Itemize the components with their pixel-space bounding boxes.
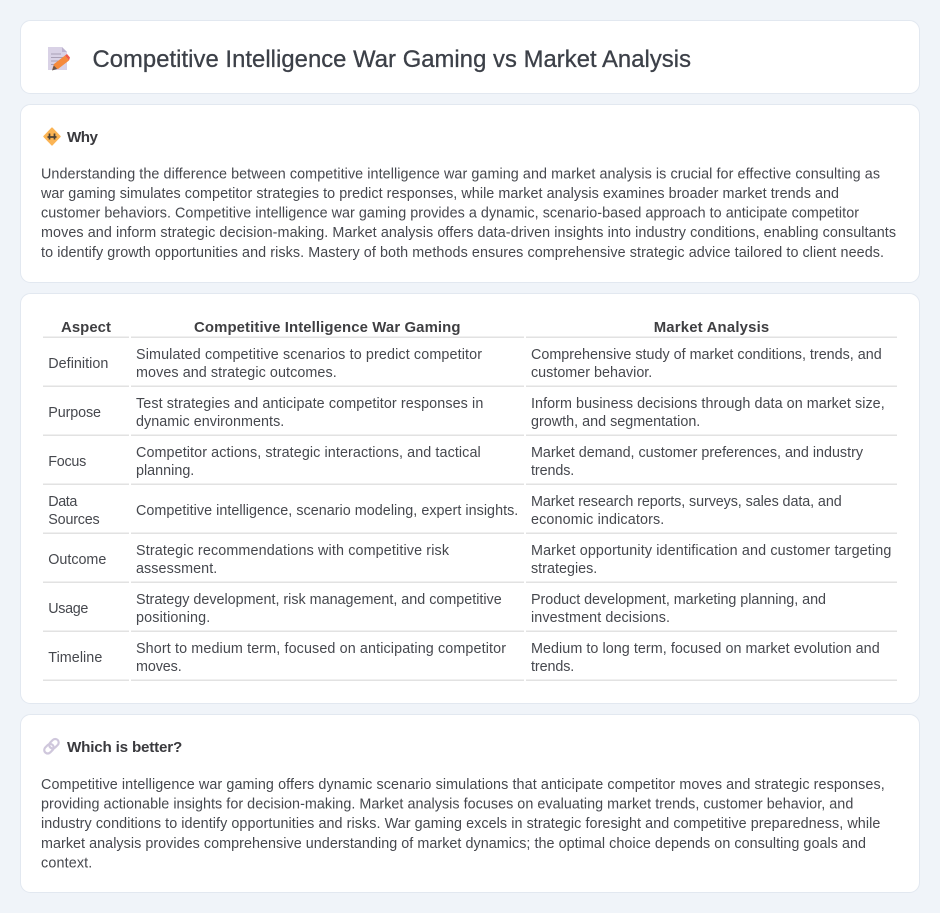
- row: usage: [43, 592, 897, 632]
- row: outcome: assessment.: [136, 561, 217, 577]
- text block: which is better paragraph: market analysis provides comprehensive understanding of market dynamics; the optimal choice depends on consulting goals and: [41, 836, 866, 852]
- icon: orange diamond sign: [44, 128, 60, 145]
- text block: which is better paragraph: context.: [41, 855, 92, 871]
- row: data sources: Data: [48, 494, 77, 510]
- row: purpose: [43, 396, 897, 436]
- row: outcome: Market opportunity identification and customer targeting: [531, 543, 891, 559]
- row: outcome: Strategic recommendations with competitive risk: [136, 543, 450, 559]
- text block: which is better paragraph: industry conditions to identify opportunities and risks. War gaming excels in strategic foresight and competitive preparedness, while: [41, 816, 880, 832]
- text block: why paragraph: moves and inform strategic decision-making. Market analysis offers data-driven insights into industry conditions, enabling consultants: [41, 225, 896, 241]
- row: focus: Focus: [48, 454, 86, 470]
- row: definition: moves and strategic outcomes.: [136, 365, 337, 381]
- row: data sources: Market research reports, surveys, sales data, and: [531, 494, 842, 510]
- row: data sources: Sources: [48, 512, 100, 528]
- row: data sources: economic indicators.: [531, 512, 664, 528]
- icon: chain link: [43, 738, 60, 755]
- text block: which is better paragraph: Competitive intelligence war gaming offers dynamic scenario simulations that anticipate competitor moves and strategic responses,: [41, 777, 885, 793]
- table header row: [43, 320, 897, 338]
- text block: why paragraph: customer behaviors. Competitive intelligence war gaming provides a dynamic, scenario-based approach to anticipate competitor: [41, 206, 859, 222]
- title: Competitive Intelligence War Gaming vs Market Analysis: [92, 46, 691, 73]
- row: purpose: dynamic environments.: [136, 414, 284, 430]
- row: usage: Strategy development, risk management, and competitive: [136, 592, 502, 608]
- row: timeline: Short to medium term, focused on anticipating competitor: [136, 641, 506, 657]
- row: focus: Market demand, customer preferences, and industry: [531, 445, 864, 461]
- text block: why paragraph: war gaming simulates competitor strategies to predict responses, while market analysis examines broader market trends and: [40, 186, 839, 202]
- row: focus: trends.: [531, 463, 574, 479]
- row: definition: Comprehensive study of market conditions, trends, and: [531, 347, 882, 363]
- table header row: Competitive Intelligence War Gaming: [194, 320, 460, 336]
- text block: which is better paragraph: [41, 777, 885, 871]
- heading: why: Why: [67, 129, 99, 146]
- row: timeline: [43, 641, 897, 681]
- row: usage: investment decisions.: [531, 610, 670, 626]
- row: purpose: growth, and segmentation.: [531, 414, 700, 430]
- row: timeline: moves.: [136, 659, 182, 675]
- row: outcome: [43, 543, 897, 583]
- row: purpose: Inform business decisions through data on market size,: [531, 396, 885, 412]
- table header row: Aspect: [61, 320, 111, 336]
- row: outcome: Outcome: [48, 552, 106, 568]
- panel: why: [20, 104, 920, 282]
- text block: why paragraph: [40, 166, 896, 261]
- text block: why paragraph: Understanding the difference between competitive intelligence war gaming and market analysis is crucial for effective consulting as: [41, 166, 880, 182]
- row: focus: [43, 445, 897, 485]
- row: focus: planning.: [136, 463, 194, 479]
- row: definition: Definition: [48, 356, 108, 372]
- panel: title header: [20, 20, 920, 94]
- row: usage: positioning.: [136, 610, 210, 626]
- icon: memo with pencil: [48, 47, 70, 70]
- row: data sources: Competitive intelligence, scenario modeling, expert insights.: [136, 503, 518, 519]
- row: definition: Simulated competitive scenarios to predict competitor: [136, 347, 482, 363]
- panel: which is better: [20, 714, 920, 892]
- row: usage: Product development, marketing planning, and: [531, 592, 826, 608]
- row: outcome: strategies.: [531, 561, 597, 577]
- row: data sources: [43, 494, 897, 534]
- row: timeline: Timeline: [48, 650, 102, 666]
- row: timeline: Medium to long term, focused on market evolution and: [531, 641, 880, 657]
- row: timeline: trends.: [531, 659, 574, 675]
- heading: which is better: Which is better?: [67, 739, 182, 756]
- row: focus: Competitor actions, strategic interactions, and tactical: [136, 445, 481, 461]
- row: purpose: Test strategies and anticipate competitor responses in: [136, 396, 483, 412]
- text block: why paragraph: to identify growth opportunities and risks. Mastery of both methods ensures comprehensive strategic advice tailored to client needs.: [41, 245, 884, 261]
- row: usage: Usage: [48, 601, 88, 617]
- row: purpose: Purpose: [48, 405, 101, 421]
- row: definition: customer behavior.: [531, 365, 652, 381]
- table header row: Market Analysis: [654, 320, 769, 336]
- text block: which is better paragraph: providing actionable insights for decision-making. Market analysis focuses on evaluating market trends, customer behavior, and: [41, 797, 853, 813]
- row: definition: [43, 347, 897, 387]
- panel: comparison table: [20, 294, 920, 704]
